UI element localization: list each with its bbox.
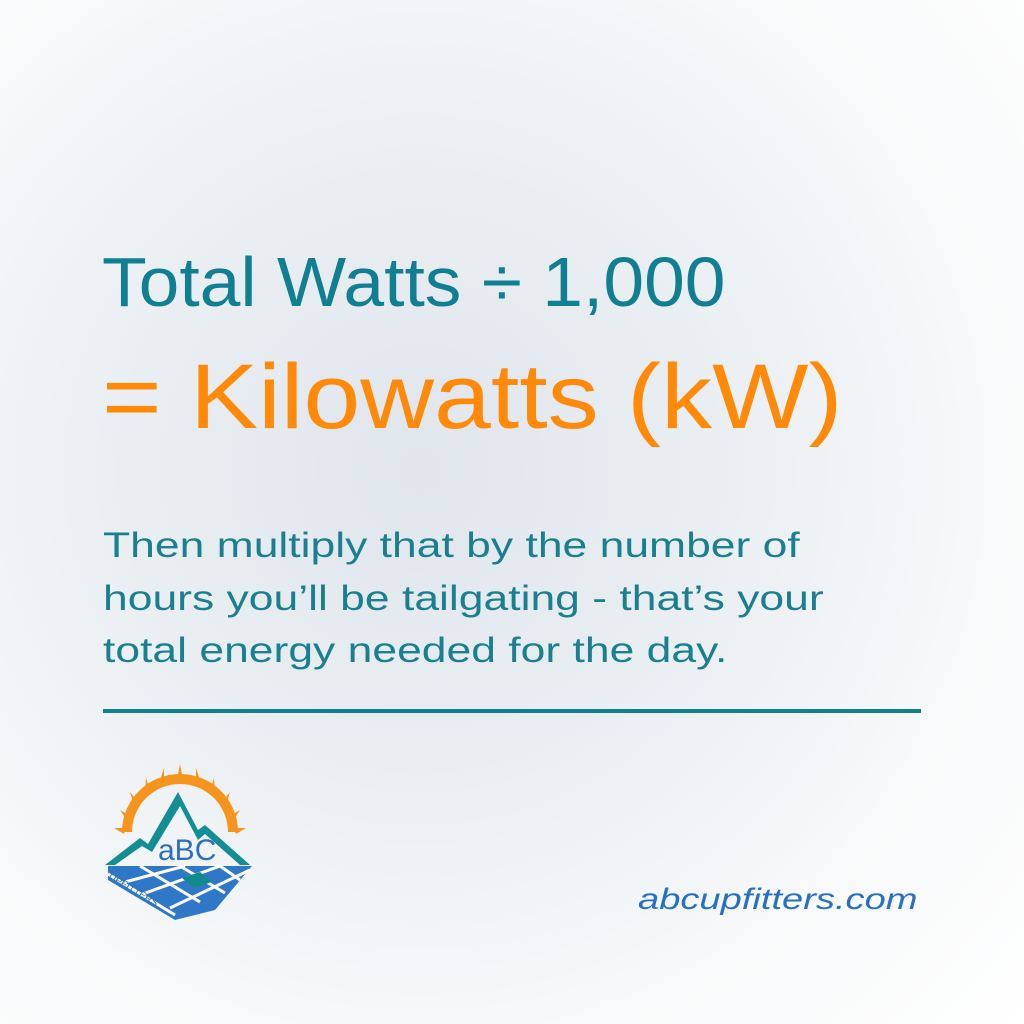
title line 1: Total Watts ÷ 1,000 — [102, 243, 726, 321]
body text — [103, 526, 824, 670]
title line 2: = Kilowatts (kW) — [102, 346, 842, 448]
website url: abcupfitters.com — [638, 883, 918, 916]
divider — [103, 709, 921, 713]
tiles — [108, 866, 252, 920]
sun rays — [114, 764, 246, 834]
logo — [105, 764, 252, 920]
body text: Then multiply that by the number of — [103, 526, 800, 565]
abc text: aBC — [158, 834, 216, 867]
body text: total energy needed for the day. — [103, 631, 727, 670]
mountain — [105, 792, 250, 865]
body text: hours you’ll be tailgating - that’s your — [103, 578, 824, 618]
logo: UPFITTERS — [106, 871, 160, 909]
